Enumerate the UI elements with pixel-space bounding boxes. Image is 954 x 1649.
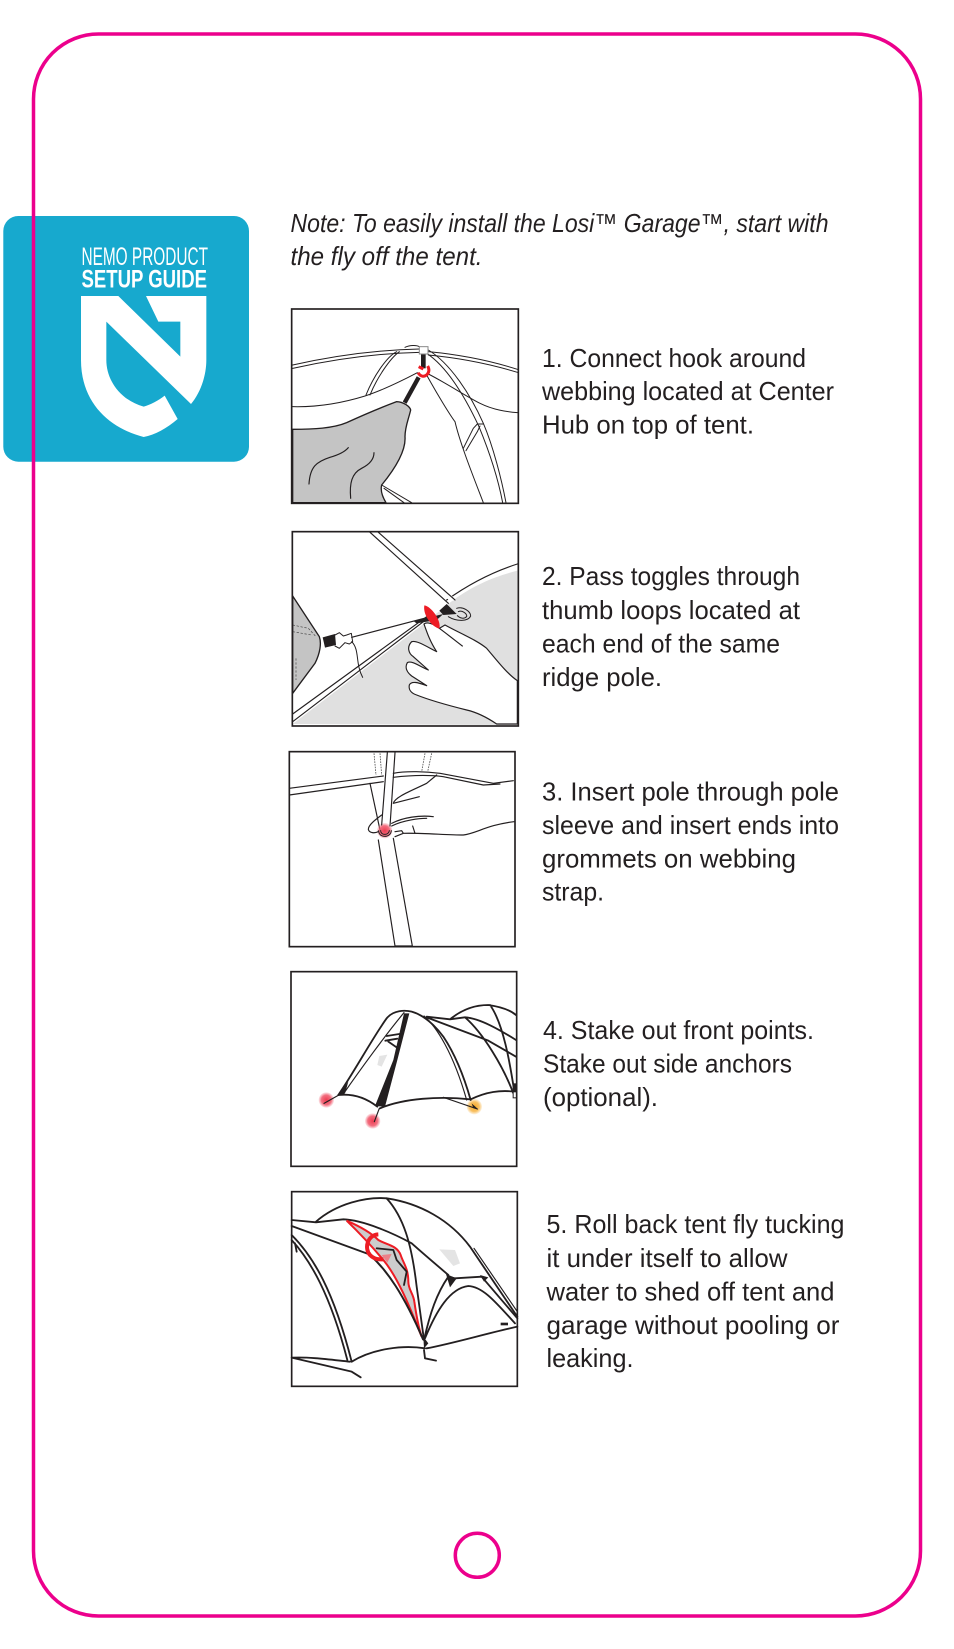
red arc	[367, 1234, 383, 1259]
small logo	[439, 1249, 460, 1266]
stake glows	[319, 1092, 334, 1108]
step 1 text: 1. Connect hook around	[542, 343, 806, 373]
step 4 text	[543, 1015, 814, 1112]
step 5 text: water to shed off tent and	[546, 1276, 834, 1306]
step 2 text: thumb loops located at	[542, 595, 801, 625]
badge title: NEMO PRODUCT	[82, 243, 208, 271]
fabric corner	[293, 596, 320, 693]
frame	[292, 309, 518, 503]
step 2 text: ridge pole.	[542, 662, 662, 692]
badge title: SETUP GUIDE	[82, 266, 207, 294]
badge title	[82, 243, 208, 294]
small logo	[377, 1055, 387, 1067]
step 2 text	[542, 561, 801, 692]
hand	[406, 623, 517, 724]
step 1 text: Hub on top of tent.	[542, 410, 754, 440]
step 5 text: garage without pooling or	[546, 1310, 840, 1340]
step 3 text: sleeve and insert ends into	[542, 810, 839, 840]
pole	[369, 532, 456, 602]
illustration 3: insert pole into grommet	[289, 752, 515, 947]
hand	[393, 775, 437, 803]
step 4 text: Stake out side anchors	[543, 1048, 792, 1078]
step 5 text: it under itself to allow	[546, 1243, 788, 1273]
eyelet	[439, 604, 457, 615]
red hook	[418, 366, 429, 376]
step 4 text: (optional).	[543, 1082, 658, 1112]
note text: the fly off the tent.	[290, 241, 482, 271]
step 3 text: 3. Insert pole through pole	[542, 776, 839, 806]
home button circle	[455, 1533, 499, 1577]
strap	[405, 377, 419, 403]
step 5 text: leaking.	[546, 1343, 634, 1373]
step 3 text: grommets on webbing	[542, 844, 796, 874]
icon: NEMO shield logo	[81, 296, 206, 437]
glow	[377, 823, 392, 838]
step 4 text: 4. Stake out front points.	[543, 1015, 814, 1045]
illustration 1: hook on center hub	[292, 309, 518, 503]
red toggle	[424, 605, 440, 629]
strap and buckle	[323, 634, 336, 648]
illustration 4: stake out points	[291, 972, 517, 1166]
note text: Note: To easily install the Losi™ Garage™, start with	[290, 208, 828, 238]
step 1 text	[541, 343, 834, 440]
step 2 text: 2. Pass toggles through	[542, 561, 800, 591]
illustration 5: roll back tent fly	[292, 1192, 517, 1386]
cloth	[293, 402, 411, 503]
step 2 text: each end of the same	[542, 628, 780, 658]
step 5 text: 5. Roll back tent fly tucking	[546, 1209, 844, 1239]
gray pocket	[347, 1221, 422, 1337]
tent	[338, 1011, 471, 1100]
pole	[382, 753, 395, 826]
step 3 text: strap.	[542, 876, 604, 906]
step 1 text: webbing located at Center	[541, 376, 834, 406]
badge: NEMO product setup guide	[3, 216, 249, 462]
step 3 text	[542, 776, 839, 906]
note text	[290, 208, 828, 271]
arches	[424, 1277, 517, 1340]
step 5 text	[546, 1209, 844, 1373]
illustration 2: toggle through thumb loop	[292, 532, 518, 726]
